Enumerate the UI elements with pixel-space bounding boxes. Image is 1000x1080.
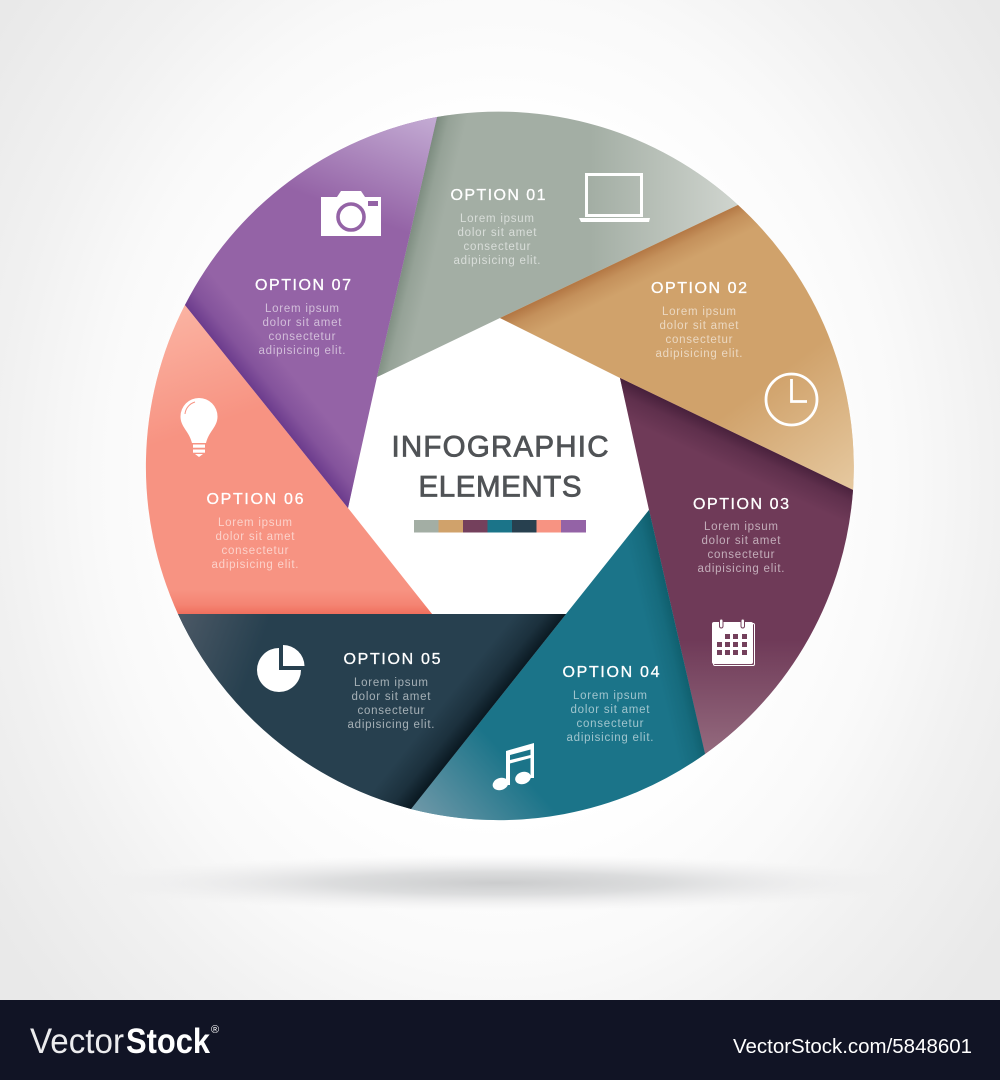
option 07 heading: OPTION 07 bbox=[255, 277, 351, 294]
option 01 body text: consectetur bbox=[464, 241, 531, 253]
option 06 body text: dolor sit amet bbox=[216, 531, 295, 543]
option 06 body text: adipisicing elit. bbox=[212, 559, 298, 571]
option 02 body text bbox=[656, 306, 742, 360]
option 05 body text bbox=[348, 677, 434, 731]
option 02 heading: OPTION 02 bbox=[651, 280, 747, 297]
option 03 heading: OPTION 03 bbox=[693, 496, 789, 513]
option 03 body text bbox=[698, 521, 784, 575]
title bbox=[392, 430, 608, 504]
option 04 body text: consectetur bbox=[576, 718, 644, 730]
colour legend bar bbox=[414, 520, 586, 532]
option 02 body text: dolor sit amet bbox=[660, 320, 739, 332]
panel: option 04 bbox=[411, 510, 705, 820]
ground shadow bbox=[80, 855, 920, 911]
icon: camera bbox=[321, 191, 381, 236]
footer bar bbox=[0, 1000, 1000, 1080]
footer logo: ® bbox=[211, 1024, 219, 1036]
option 07 body text: adipisicing elit. bbox=[258, 345, 346, 357]
option 07 body text bbox=[258, 303, 346, 357]
option 01 body text: adipisicing elit. bbox=[454, 255, 540, 267]
option 01 heading: OPTION 01 bbox=[450, 187, 546, 204]
option 06 body text bbox=[212, 517, 298, 571]
option 02 body text: adipisicing elit. bbox=[656, 348, 742, 360]
option 03 body text: adipisicing elit. bbox=[698, 563, 784, 575]
option 02 body text: consectetur bbox=[666, 334, 733, 346]
icon: calendar bbox=[712, 619, 754, 666]
option 05 heading: OPTION 05 bbox=[344, 651, 441, 668]
icon: clock bbox=[766, 374, 817, 425]
option 06 body text: consectetur bbox=[222, 545, 289, 557]
option 03 body text: consectetur bbox=[708, 549, 775, 561]
option 01 body text: Lorem ipsum bbox=[460, 213, 534, 225]
option 03 body text: dolor sit amet bbox=[702, 535, 781, 547]
panel: option 01 bbox=[377, 112, 738, 377]
option 06 body text: Lorem ipsum bbox=[218, 517, 292, 529]
icon: laptop bbox=[579, 174, 650, 222]
panel: option 02 bbox=[500, 205, 854, 490]
icon: music note bbox=[491, 743, 534, 792]
option 04 body text: Lorem ipsum bbox=[573, 690, 647, 702]
option 03 body text: Lorem ipsum bbox=[704, 521, 778, 533]
option 02 body text: Lorem ipsum bbox=[662, 306, 736, 318]
option 04 body text bbox=[566, 690, 654, 744]
panel: option 06 bbox=[146, 305, 432, 614]
option 07 body text: dolor sit amet bbox=[262, 317, 342, 329]
option 01 body text: dolor sit amet bbox=[458, 227, 537, 239]
option 05 body text: consectetur bbox=[358, 705, 425, 717]
icon: pie chart bbox=[257, 645, 304, 692]
option 01 body text bbox=[454, 213, 540, 267]
title: INFOGRAPHIC bbox=[392, 430, 608, 464]
option 05 body text: Lorem ipsum bbox=[354, 677, 428, 689]
footer image id: VectorStock.com/5848601 bbox=[733, 1036, 972, 1058]
option 05 body text: adipisicing elit. bbox=[348, 719, 434, 731]
option 06 heading: OPTION 06 bbox=[206, 491, 304, 508]
panel: option 07 bbox=[185, 117, 437, 508]
panel: option 03 bbox=[620, 378, 853, 754]
option 04 heading: OPTION 04 bbox=[562, 664, 660, 681]
icon: light bulb bbox=[180, 398, 218, 457]
panel: option 05 bbox=[178, 614, 566, 809]
footer logo: VectorStock bbox=[30, 1022, 221, 1061]
title: ELEMENTS bbox=[418, 470, 582, 504]
option 07 body text: consectetur bbox=[268, 331, 336, 343]
option 05 body text: dolor sit amet bbox=[352, 691, 431, 703]
option 07 body text: Lorem ipsum bbox=[265, 303, 339, 315]
option 04 body text: dolor sit amet bbox=[570, 704, 650, 716]
option 04 body text: adipisicing elit. bbox=[566, 732, 654, 744]
